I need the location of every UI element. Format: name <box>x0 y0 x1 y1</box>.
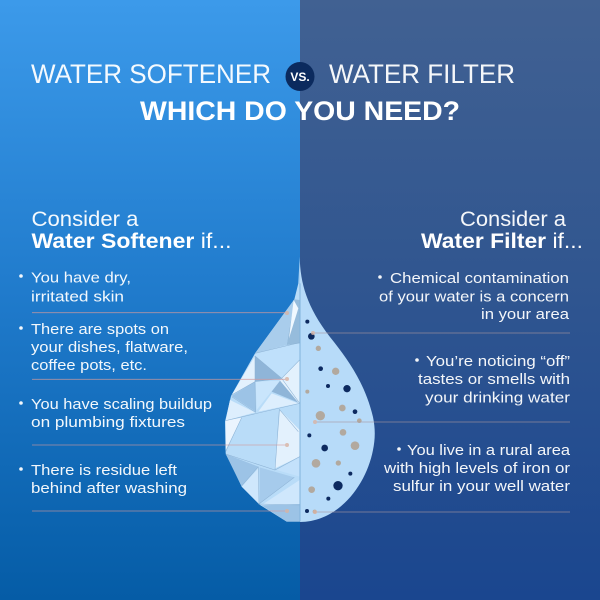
reason: off tastes: You’re noticing “off” <box>426 353 570 370</box>
title <box>31 59 515 126</box>
reason: scaling buildup <box>19 396 212 431</box>
illustration: water drop <box>225 257 375 522</box>
icon: vs badge: VS. <box>290 70 310 84</box>
reason: rural area: with high levels of iron or <box>383 460 570 477</box>
reason: spots on dishes <box>19 321 188 374</box>
reason: off tastes <box>415 353 570 406</box>
reason: rural area: You live in a rural area <box>407 442 571 459</box>
leader lines: filter <box>311 331 570 514</box>
panel: water filter background <box>300 0 600 600</box>
reason: chemical contamination: in your area <box>481 306 570 323</box>
heading: water filter: WATER FILTER <box>329 59 515 89</box>
water softener heading: Consider a <box>32 207 139 231</box>
leader lines: softener <box>32 311 289 513</box>
reason: residue: behind after washing <box>31 480 187 497</box>
water filter heading: Water Filter if... <box>421 229 583 253</box>
reason: residue: There is residue left <box>31 462 178 479</box>
reason: spots on dishes: coffee pots, etc. <box>31 357 147 374</box>
reason: dry skin <box>19 270 131 306</box>
water filter heading: Consider a <box>460 207 566 231</box>
reason: chemical contamination <box>378 270 570 323</box>
water softener heading <box>32 207 232 253</box>
reason: scaling buildup: on plumbing fixtures <box>31 414 185 431</box>
reason: dry skin: irritated skin <box>31 288 124 306</box>
heading: water softener: WATER SOFTENER <box>31 59 271 89</box>
reason: chemical contamination: Chemical contamination <box>390 270 569 287</box>
reason: rural area: sulfur in your well water <box>393 478 570 495</box>
water filter heading <box>421 207 583 253</box>
divider line in drop <box>298 283 301 522</box>
reason: spots on dishes: your dishes, flatware, <box>31 339 188 356</box>
reason: spots on dishes: There are spots on <box>31 321 169 338</box>
reason: off tastes: your drinking water <box>425 390 570 406</box>
reason: off tastes: tastes or smells with <box>418 371 570 388</box>
reason: dry skin: You have dry, <box>31 270 131 286</box>
heading: which do you need: WHICH DO YOU NEED? <box>140 96 460 126</box>
filter reasons list <box>378 270 571 495</box>
icon: vs badge <box>286 62 314 91</box>
drop: left half crystal <box>225 257 300 522</box>
softener reasons list <box>19 270 212 497</box>
reason: residue <box>19 462 187 497</box>
reason: scaling buildup: You have scaling buildup <box>31 396 212 413</box>
reason: rural area <box>383 442 571 495</box>
water softener heading: Water Softener if... <box>32 229 232 253</box>
drop: right half with particles <box>300 257 375 522</box>
reason: chemical contamination: of your water is a concern <box>379 288 569 306</box>
panel: water softener background <box>0 0 300 600</box>
